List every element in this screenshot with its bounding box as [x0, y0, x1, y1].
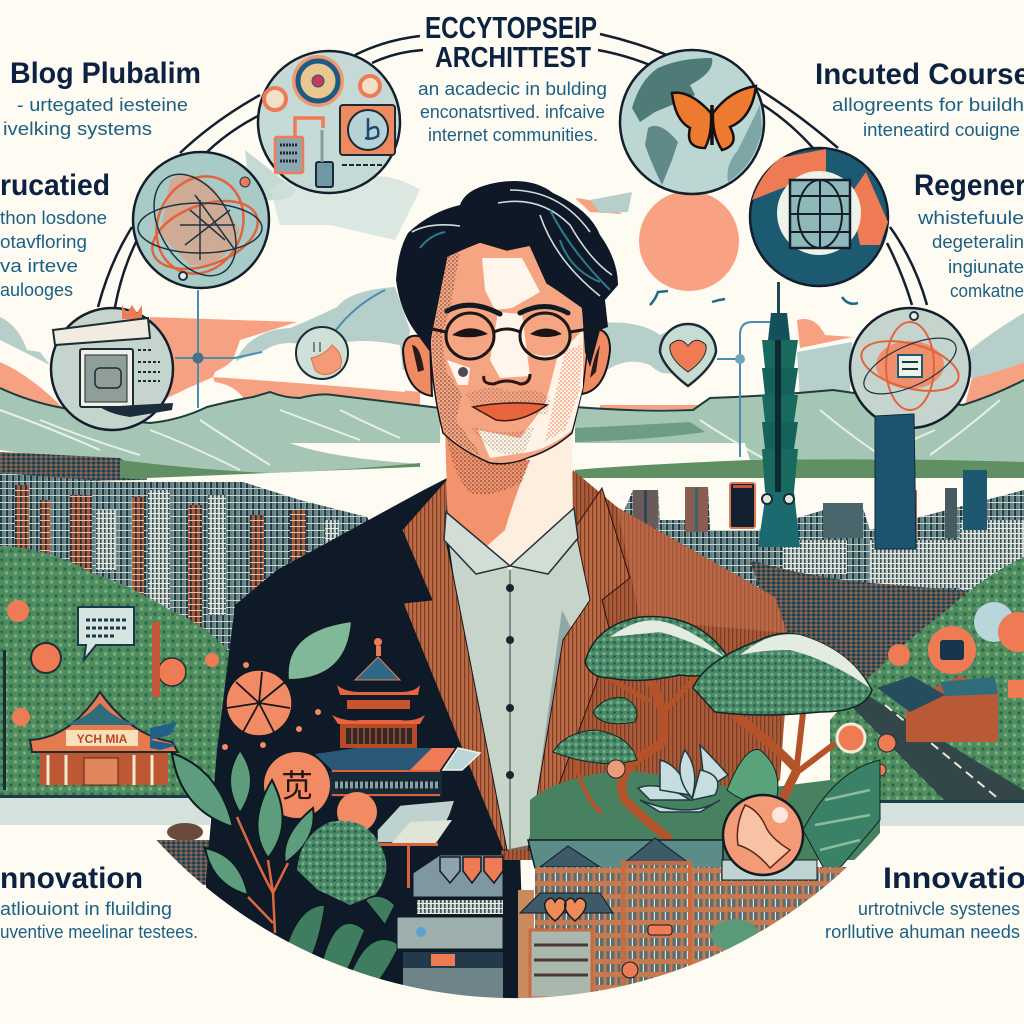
text block: regener: ingiunate: [948, 257, 1024, 277]
shoulder highlight: [617, 507, 787, 633]
right village: [877, 602, 1024, 742]
orange shields: [440, 857, 503, 883]
left temple: [30, 692, 178, 785]
text block: innovation left: nnovation: [0, 862, 143, 895]
speech bubble icon: [78, 607, 134, 660]
shirt halftone: [505, 610, 572, 850]
left lapel: [402, 478, 507, 850]
title: ECCYTOPSEIP: [425, 10, 597, 45]
city right: [620, 483, 1024, 680]
sky with clouds and salmon bands: [0, 150, 1024, 410]
lens tint: [450, 348, 565, 358]
text block: innovation left: uventive meelinar testees.: [0, 922, 198, 942]
ferns: [287, 896, 400, 985]
left hill markers: [3, 600, 219, 790]
cheek stipple right: [545, 345, 582, 442]
hair strands teal: [420, 210, 610, 290]
mouth: [473, 403, 547, 421]
neck shadow: [445, 425, 530, 552]
taipei 101 tower: [758, 282, 800, 547]
neck: [445, 420, 573, 566]
text block: innovation left: [0, 862, 198, 942]
text block: incuted course: [815, 58, 1024, 140]
title: ARCHITTEST: [435, 42, 591, 74]
ear inner: [412, 345, 600, 378]
lower lake: [147, 466, 880, 520]
right hill and road: [830, 557, 1024, 810]
circle: machinery icon: [258, 51, 400, 193]
tea sprig: [172, 750, 314, 933]
circle: globe with butterfly: [620, 50, 764, 194]
lotus: [638, 745, 728, 812]
small birds: [650, 291, 858, 305]
second dark tower: [963, 470, 987, 530]
text block: innovation right: Innovatio: [883, 862, 1024, 895]
decorative dots: [222, 662, 321, 750]
eyebrows: [447, 305, 568, 314]
text block: innovation right: rorllutive ahuman needs: [825, 922, 1020, 942]
city left: [0, 473, 380, 660]
circle: network sphere: [133, 152, 269, 290]
tree crowns: [553, 617, 872, 764]
ground foliage: [530, 770, 880, 860]
shirt: [447, 528, 592, 850]
pagoda: [332, 638, 425, 748]
text block: innovation right: urtrotnivcle systenes: [858, 899, 1020, 919]
forehead highlight: [482, 258, 540, 310]
text block: blog: [3, 57, 201, 139]
right lapel: [528, 488, 630, 850]
circle: atom badge: [850, 308, 970, 428]
shirt buttons: [506, 570, 514, 850]
hair strands: [412, 190, 612, 296]
orange globe: [723, 795, 803, 875]
text block: rucatied: aulooges: [0, 280, 73, 300]
upper lake: [290, 443, 750, 470]
portrait: [206, 181, 790, 1010]
face: [430, 242, 588, 464]
jacket left dark: [206, 478, 525, 1010]
subtitle: enconatsrtived. infcaive: [420, 102, 605, 122]
left hill: [0, 546, 235, 810]
left temple: YCH MIA: [77, 732, 128, 746]
cheek patch with mole: [447, 360, 470, 385]
jacket right brown: [500, 470, 790, 860]
upper leaf: [288, 621, 352, 680]
townhouses: [518, 838, 880, 1000]
connecting arcs: [98, 34, 927, 457]
text block: incuted course: allogreents for buildh: [832, 95, 1024, 115]
green leaves: [727, 750, 778, 805]
circle: laptop: [51, 305, 173, 430]
bottom cream cover: [0, 826, 1024, 1024]
circle: small flask: [296, 327, 348, 379]
glasses: [432, 313, 594, 359]
circle: wireframe globe badge: [750, 148, 888, 286]
second medallion: [337, 792, 377, 832]
neck stipple: [447, 438, 530, 494]
road strips: [0, 795, 1024, 826]
tall dark tower: [875, 414, 916, 549]
text block: incuted course: inteneatird couigne: [863, 120, 1020, 140]
icon: heart bubble: [660, 324, 716, 386]
cheek highlight right: [478, 330, 583, 458]
text block: rucatied: [0, 169, 110, 300]
chin stipple: [470, 425, 535, 454]
text block: blog: ivelking systems: [3, 119, 152, 139]
text block: regener: whistefuule: [917, 208, 1024, 228]
lower right illustration: [518, 617, 896, 1000]
text block: innovation right: [825, 862, 1024, 942]
text block: blog: Blog Plubalim: [10, 57, 201, 90]
ears: [403, 329, 610, 396]
hearts: [545, 898, 586, 921]
text block: rucatied: thon losdone: [0, 208, 107, 228]
flowers: [607, 724, 896, 778]
orange symbol medallion: 苋: [281, 768, 313, 804]
trunks: [575, 673, 833, 838]
subtitle: internet communities.: [428, 125, 598, 145]
title: [425, 10, 597, 74]
text block: rucatied: va irteve: [0, 256, 78, 276]
pale roof pavilion: [377, 800, 455, 888]
mountains: [0, 380, 1024, 482]
butterfly: [672, 86, 756, 150]
text block: blog: - urtegated iesteine: [17, 95, 188, 115]
bush: [297, 821, 386, 905]
connector nodes: [192, 352, 745, 364]
subtitle: an acadecic in bulding: [418, 79, 607, 99]
text block: innovation left: atliouiont in fluilding: [0, 899, 172, 919]
orange symbol medallion: [264, 752, 330, 818]
collar: [444, 508, 578, 574]
subtitle: [418, 79, 607, 145]
hair: [396, 181, 618, 367]
lower left illustration: [172, 621, 503, 998]
moustache stipple: [465, 388, 550, 415]
text block: rucatied: rucatied: [0, 169, 110, 202]
text block: rucatied: otavfloring: [0, 232, 87, 252]
fan foliage right: [803, 760, 880, 880]
long roof building: [315, 748, 480, 797]
eyes: [452, 328, 562, 337]
orange fruit: [226, 670, 292, 736]
central lower building: [397, 855, 503, 998]
nose highlight: [490, 312, 530, 378]
left face stipple: [432, 252, 482, 456]
text block: regener: [914, 169, 1024, 301]
nose: [484, 374, 530, 384]
roadside shrubs: [150, 823, 210, 885]
sun: [639, 191, 739, 291]
text block: regener: degeteralin: [932, 232, 1024, 252]
